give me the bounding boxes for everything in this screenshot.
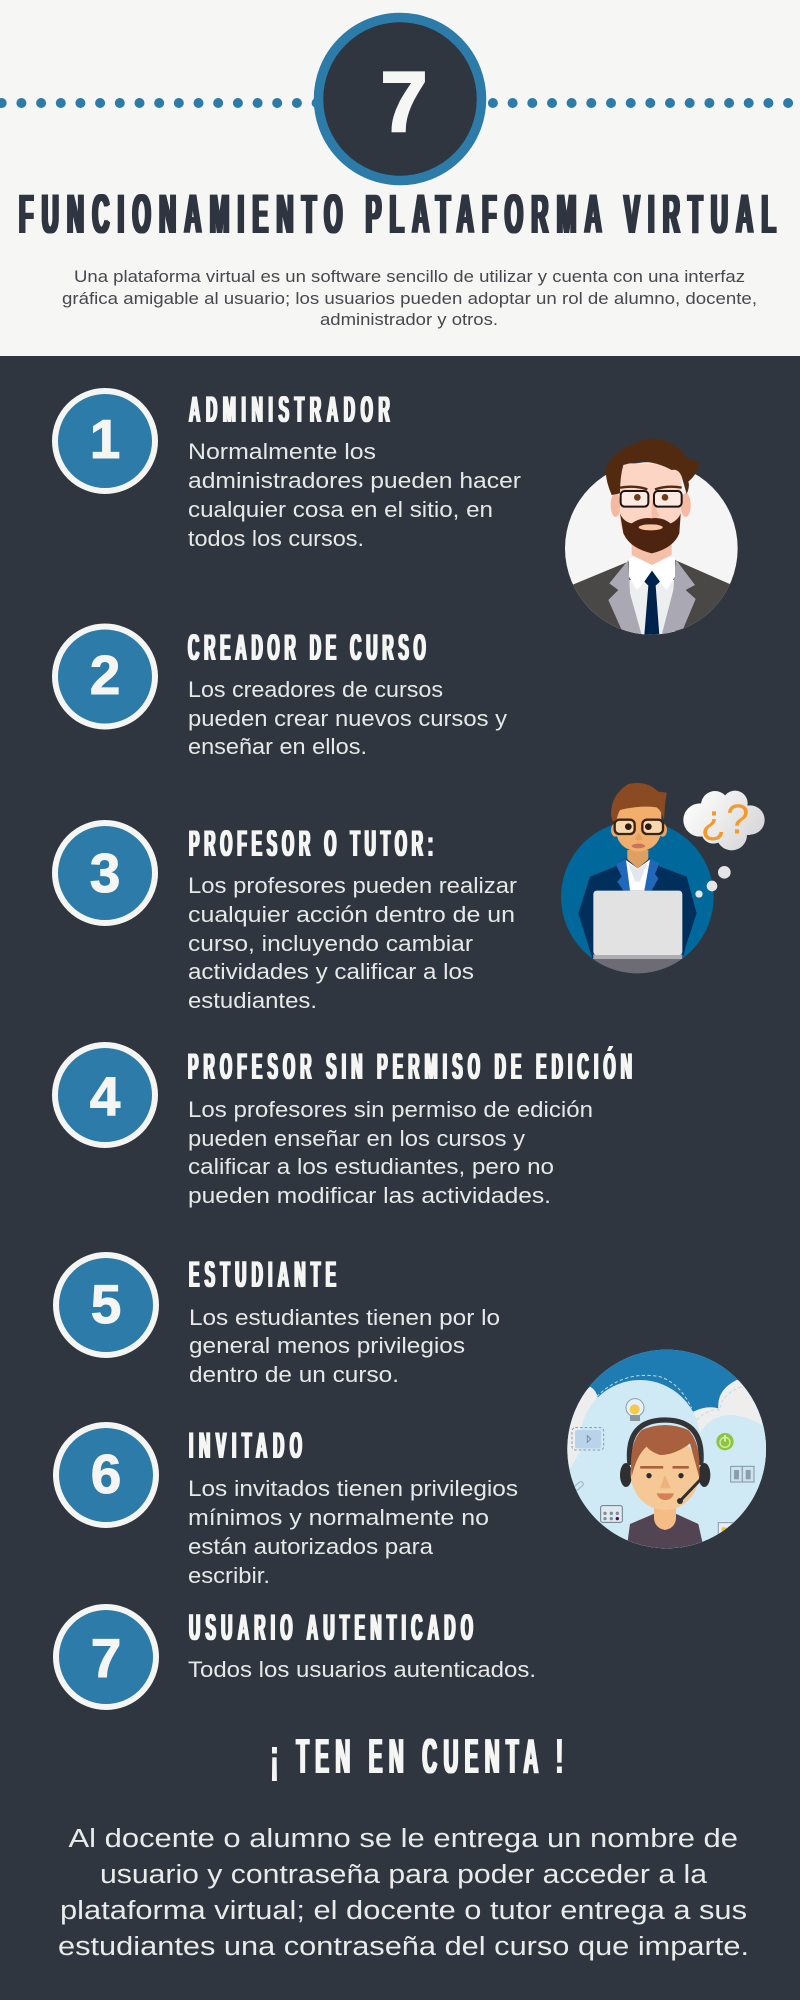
heading 1: ADMINISTRADOR <box>189 389 390 431</box>
step 3: profesor o tutor <box>55 823 518 1013</box>
intro text: administrador y otros. <box>320 311 498 329</box>
title: FUNCIONAMIENTO PLATAFORMA VIRTUAL <box>19 183 776 246</box>
body 5: dentro de un curso. <box>189 1362 399 1387</box>
body 1: cualquier cosa en el sitio, en <box>188 497 493 522</box>
closing paragraph: plataforma virtual; el docente o tutor entrega a sus <box>60 1897 747 1925</box>
illustration: bearded administrator <box>560 439 743 640</box>
step 4: profesor sin permiso de edicion <box>55 1045 632 1208</box>
body 4 <box>188 1097 593 1208</box>
body 6: mínimos y normalmente no <box>188 1505 489 1530</box>
body 6 <box>188 1476 518 1588</box>
illustration: teacher with laptop and thought bubble <box>561 783 765 978</box>
body 6: están autorizados para <box>188 1534 434 1559</box>
body 6: Los invitados tienen privilegios <box>188 1476 518 1501</box>
header badge with number 7: 7 <box>380 55 428 150</box>
heading 3: PROFESOR O TUTOR: <box>189 823 433 865</box>
body 1 <box>188 439 522 551</box>
body 4: pueden modificar las actividades. <box>188 1183 551 1208</box>
heading 5: ESTUDIANTE <box>189 1254 336 1296</box>
closing paragraph <box>58 1825 749 1961</box>
body 2: Los creadores de cursos <box>188 677 443 702</box>
body 4: pueden enseñar en los cursos y <box>188 1126 526 1151</box>
number badge 2: 2 <box>90 644 120 706</box>
body 5: general menos privilegios <box>189 1333 465 1358</box>
number badge 1 <box>55 391 155 491</box>
number badge 1: 1 <box>90 408 120 470</box>
body 3: curso, incluyendo cambiar <box>188 931 474 956</box>
heading 4: PROFESOR SIN PERMISO DE EDICIÓN <box>188 1046 632 1088</box>
body 2: enseñar en ellos. <box>188 734 367 759</box>
heading 6: INVITADO <box>189 1425 302 1467</box>
step 7: usuario autenticado <box>56 1607 536 1707</box>
dotted line <box>0 98 793 108</box>
body 4: Los profesores sin permiso de edición <box>188 1097 593 1122</box>
body 3: actividades y calificar a los <box>188 959 474 984</box>
closing heading: ¡ TEN EN CUENTA ! <box>271 1729 563 1783</box>
header badge with number 7 <box>318 18 482 180</box>
number badge 3 <box>55 823 155 923</box>
body 1: todos los cursos. <box>188 526 364 551</box>
number badge 6: 6 <box>91 1443 121 1505</box>
number badge 5: 5 <box>91 1273 121 1335</box>
step 2: creador de curso <box>55 626 508 759</box>
step 1: administrador <box>55 389 522 551</box>
number badge 6 <box>56 1425 156 1525</box>
intro text <box>62 268 757 329</box>
closing paragraph: estudiantes una contraseña del curso que imparte. <box>58 1933 749 1961</box>
body 1: Normalmente los <box>188 439 376 464</box>
number badge 4: 4 <box>90 1065 121 1127</box>
intro text: gráfica amigable al usuario; los usuarios pueden adoptar un rol de alumno, docente, <box>62 290 757 308</box>
body 3: cualquier acción dentro de un <box>188 902 515 927</box>
body 5 <box>189 1305 500 1387</box>
body 3: estudiantes. <box>188 988 317 1013</box>
body 2: pueden crear nuevos cursos y <box>188 706 508 731</box>
body 5: Los estudiantes tienen por lo <box>189 1305 500 1330</box>
number badge 4 <box>55 1045 155 1145</box>
body 3 <box>188 873 518 1013</box>
number badge 5 <box>56 1255 156 1355</box>
body 6: escribir. <box>188 1563 270 1588</box>
closing paragraph: usuario y contraseña para poder acceder a la <box>100 1861 708 1889</box>
intro text: Una plataforma virtual es un software sencillo de utilizar y cuenta con una interfaz <box>74 268 745 286</box>
step 6: invitado <box>56 1425 518 1588</box>
body 1: administradores pueden hacer <box>188 468 522 493</box>
number badge 3: 3 <box>90 842 120 904</box>
heading 7: USUARIO AUTENTICADO <box>189 1607 473 1649</box>
body 2 <box>188 677 508 759</box>
body 4: calificar a los estudiantes, pero no <box>188 1154 554 1179</box>
number badge 7 <box>56 1607 156 1707</box>
heading 2: CREADOR DE CURSO <box>188 627 426 669</box>
illustration: teacher with laptop and thought bubble: ¿? <box>701 795 749 842</box>
closing paragraph: Al docente o alumno se le entrega un nombre de <box>68 1825 738 1853</box>
header background <box>0 0 800 356</box>
body 3: Los profesores pueden realizar <box>188 873 518 898</box>
step 5: estudiante <box>56 1254 500 1387</box>
number badge 7: 7 <box>91 1627 121 1689</box>
illustration: support agent with headset <box>563 1347 770 1557</box>
body 7: Todos los usuarios autenticados. <box>188 1657 536 1682</box>
number badge 2 <box>55 626 155 726</box>
